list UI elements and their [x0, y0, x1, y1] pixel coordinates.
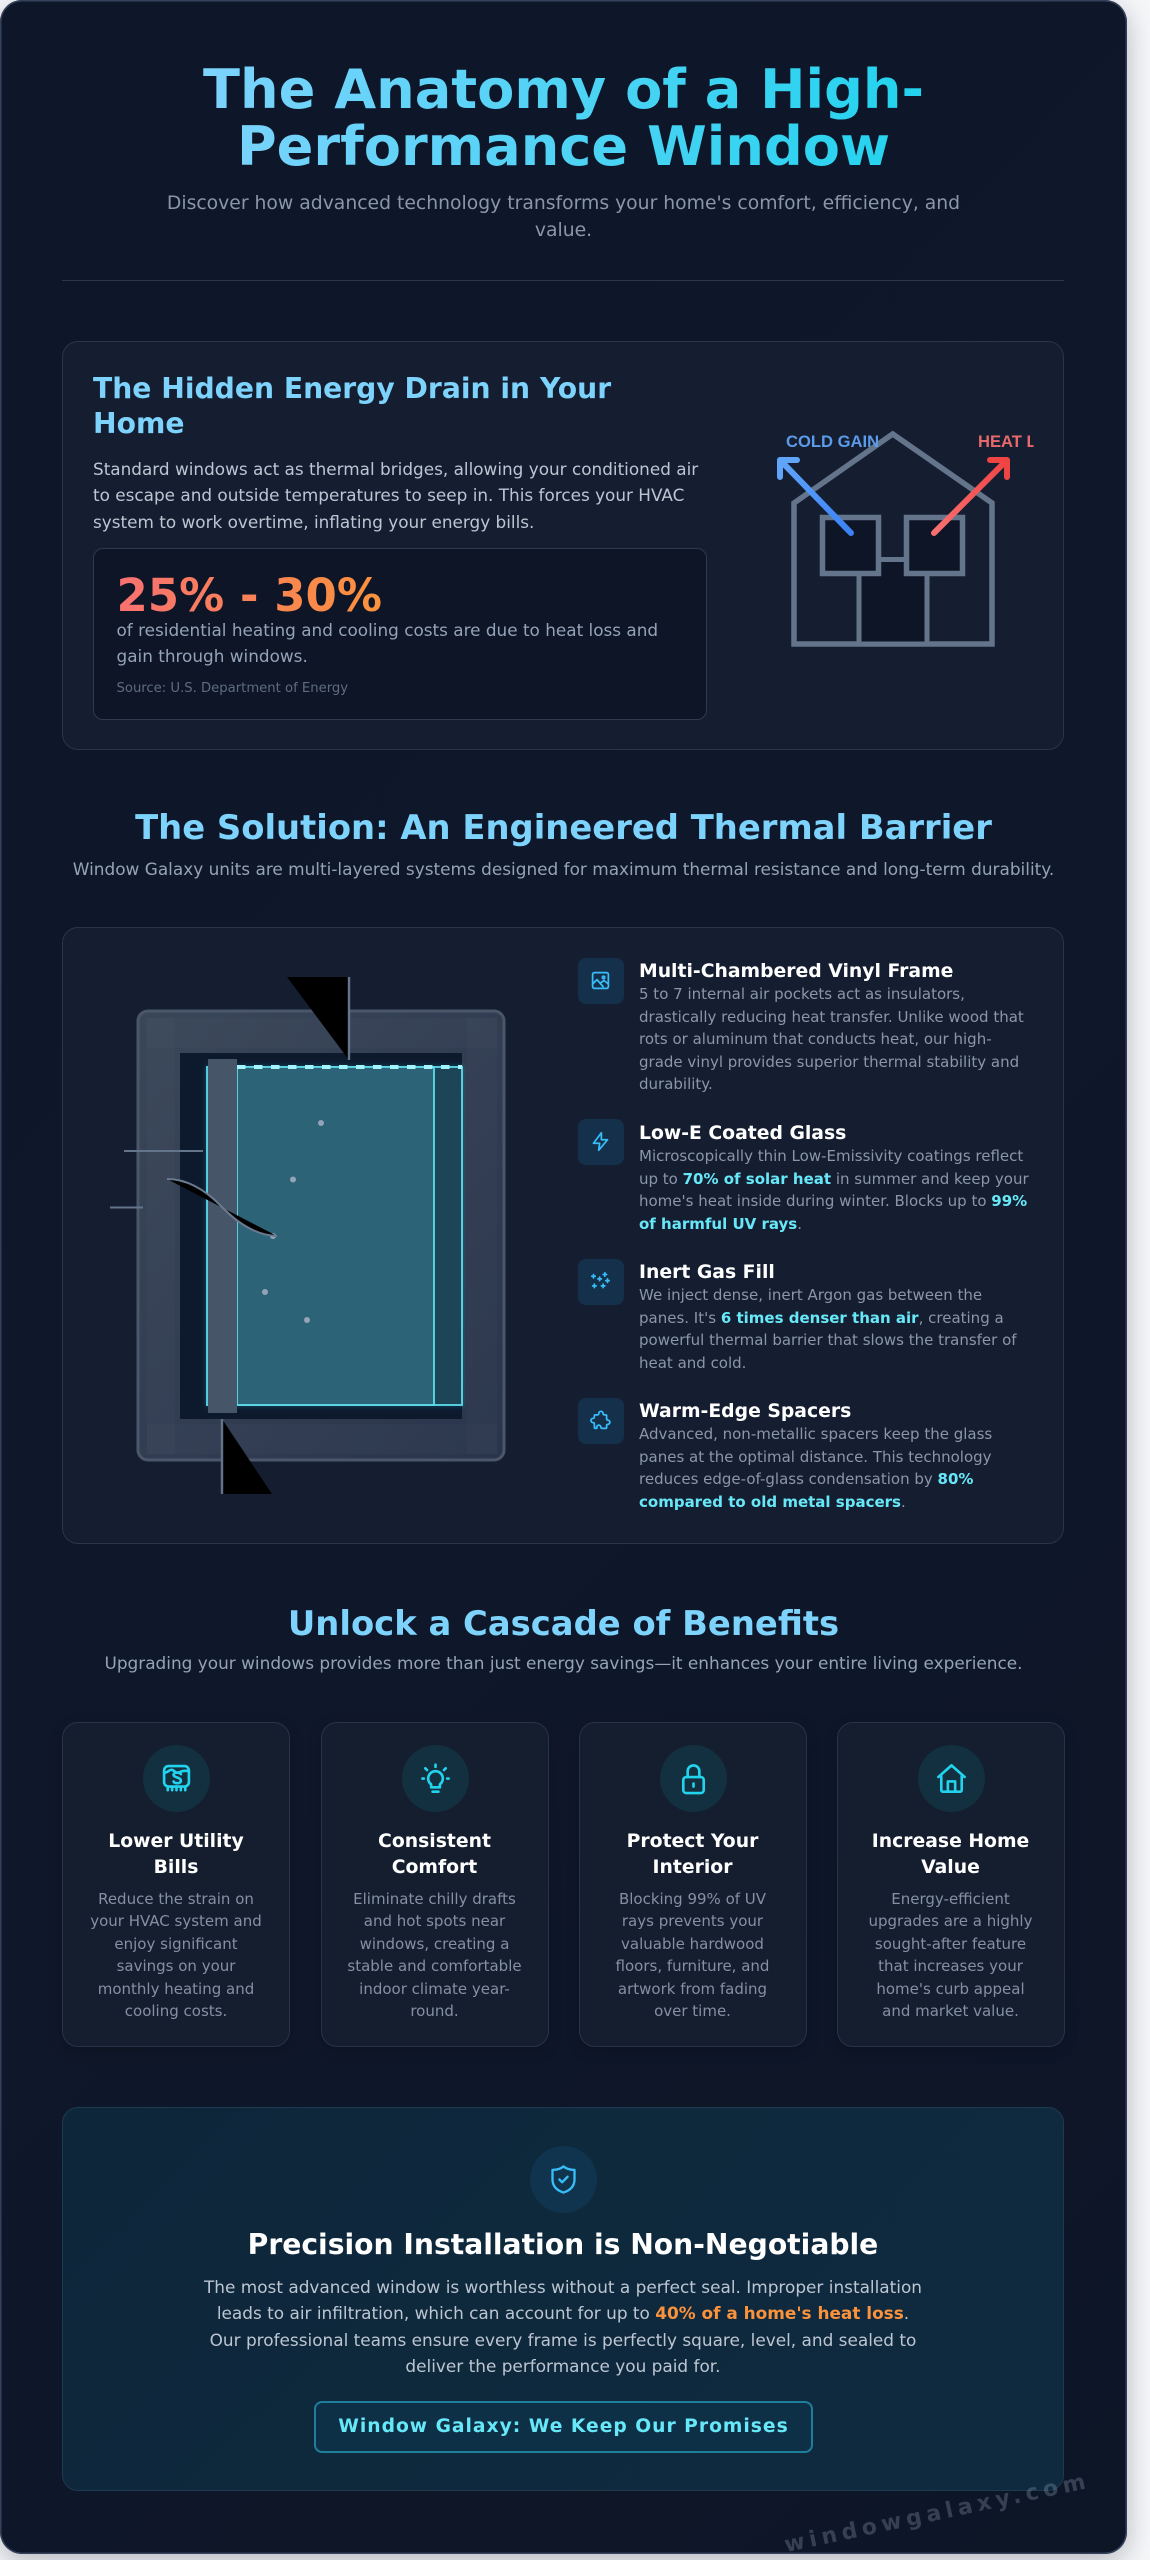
benefit card: interior [578, 1722, 806, 2047]
panel text: The most advanced window is worthless without a perfect seal. Improper installation [204, 2277, 922, 2297]
card text: floors, furniture, and [616, 1957, 769, 1975]
card title: Increase Home [872, 1830, 1029, 1852]
icon: shield check [530, 2146, 597, 2213]
card title: Bills [154, 1856, 198, 1878]
panel text [204, 2277, 922, 2376]
feature text: glass: of harmful UV rays. [639, 1214, 802, 1232]
feature text: spacers: reduces edge-of-glass condensation by 80% [639, 1470, 973, 1488]
card title: Lower Utility [108, 1830, 244, 1852]
card title: Consistent [378, 1830, 491, 1852]
feature text: spacers: Advanced, non-metallic spacers keep the glass [639, 1425, 992, 1443]
problem text [93, 459, 698, 532]
title [203, 58, 924, 178]
card text: Blocking 99% of UV [619, 1890, 766, 1908]
heat arrow [934, 460, 1007, 533]
low-e coating line [237, 1065, 462, 1069]
feature text: spacers: compared to old metal spacers. [639, 1492, 906, 1510]
header divider [62, 280, 1064, 281]
pointer: gas curve [167, 1179, 277, 1236]
icon: lock [660, 1745, 726, 1812]
left window [822, 518, 878, 574]
feature text: gas: We inject dense, inert Argon gas between the [639, 1286, 982, 1304]
panel heading: Home [93, 407, 184, 440]
panel text: leads to air infiltration, which can account for up to 40% of a home's heat loss. [217, 2303, 909, 2323]
card text [868, 1890, 1032, 2020]
card title [627, 1830, 758, 1878]
card text [616, 1890, 769, 2020]
card text: artwork from fading [618, 1980, 767, 1998]
feature icon: glass [578, 1119, 624, 1164]
feature text: gas: panes. It's 6 times denser than air, creating a [639, 1308, 1004, 1326]
card text [347, 1890, 522, 2020]
pointer: frame [124, 1150, 203, 1152]
card text: and market value. [882, 2002, 1019, 2020]
feature text: spacers: panes at the optimal distance. This technology [639, 1448, 992, 1466]
icon: light bulb [402, 1745, 468, 1812]
feature text: frame: rots or aluminum that conducts heat, our high- [639, 1030, 992, 1048]
feature icon: gas [578, 1259, 624, 1304]
section subheading: solution: Window Galaxy units are multi-layered systems designed for maximum thermal resistance and long-term durability. [73, 858, 1054, 878]
subtitle: value. [535, 220, 592, 241]
stat description: of residential heating and cooling costs are due to heat loss and [116, 620, 658, 640]
panel: precision installation [62, 2107, 1064, 2491]
spacer bar [208, 1059, 237, 1413]
card text: Eliminate chilly drafts [353, 1890, 516, 1908]
card text: over time. [654, 2002, 731, 2020]
call to action button: Window Galaxy: We Keep Our Promises [338, 2416, 789, 2437]
panel text: Our professional teams ensure every frame is perfectly square, level, and sealed to [210, 2330, 916, 2350]
window cross-section diagram [110, 977, 506, 1494]
icon: bill [143, 1745, 210, 1812]
subtitle [167, 193, 960, 241]
house outline [794, 434, 992, 644]
card text: your HVAC system and [90, 1912, 262, 1930]
card text: indoor climate year- [359, 1980, 510, 1998]
feature text: gas [639, 1286, 1017, 1372]
call to action button [314, 2401, 813, 2453]
card title [378, 1830, 491, 1878]
card text: home's curb appeal [876, 1980, 1025, 1998]
stat description [116, 620, 658, 666]
inner glass pane [237, 1067, 434, 1405]
card text: Reduce the strain on [98, 1890, 254, 1908]
title: The Anatomy of a High- [203, 58, 924, 121]
pointer: chamber [110, 1206, 143, 1208]
card text: that increases your [878, 1957, 1023, 1975]
section subheading: benefits: Upgrading your windows provides more than just energy savings—it enhances your entire living experience. [104, 1653, 1023, 1673]
cold arrow [780, 460, 851, 533]
problem text: to escape and outside temperatures to seep in. This forces your HVAC [93, 485, 684, 505]
feature title: gas: Inert Gas Fill [639, 1262, 775, 1282]
benefit card: utility bills [62, 1722, 290, 2047]
feature text: frame [639, 985, 1024, 1093]
feature title: glass: Low-E Coated Glass [639, 1122, 846, 1144]
stat number: 25% - 30% [116, 569, 382, 622]
card title [108, 1830, 244, 1878]
card text: stable and comfortable [347, 1957, 522, 1975]
card title: Interior [653, 1856, 732, 1878]
stat description: gain through windows. [116, 646, 308, 666]
card text: and hot spots near [364, 1912, 505, 1930]
card title: Value [921, 1856, 980, 1878]
subtitle: Discover how advanced technology transforms your home's comfort, efficiency, and [167, 193, 960, 214]
section heading: solution: The Solution: An Engineered Thermal Barrier [135, 808, 992, 847]
benefit card: home value [836, 1722, 1064, 2047]
card text: Energy-efficient [891, 1890, 1010, 1908]
feature title: frame: Multi-Chambered Vinyl Frame [639, 960, 953, 982]
feature text: gas: powerful thermal barrier that slows the transfer of [639, 1331, 1017, 1349]
feature text: gas: heat and cold. [639, 1354, 746, 1372]
panel heading: The Hidden Energy Drain in Your [93, 372, 611, 405]
panel text: deliver the performance you paid for. [405, 2356, 721, 2376]
card text: monthly heating and [98, 1980, 254, 1998]
outer glass pane [207, 1067, 462, 1405]
gas fill dots [262, 1120, 324, 1323]
card text: rays prevents your [622, 1912, 763, 1930]
feature text: frame: durability. [639, 1075, 713, 1093]
pointer: top stem [348, 977, 350, 1060]
panel: engineered window [62, 927, 1064, 1544]
feature text: frame: drastically reducing heat transfer. Unlike wood that [639, 1008, 1024, 1026]
panel heading [93, 372, 612, 440]
frame chambers [147, 1018, 497, 1454]
feature text: glass: Microscopically thin Low-Emissivity coatings reflect [639, 1147, 1023, 1165]
feature icon: spacers [578, 1398, 624, 1444]
stat callout [93, 548, 707, 720]
feature icon: frame [578, 958, 624, 1004]
glass glow [207, 1067, 462, 1405]
feature title: spacers: Warm-Edge Spacers [639, 1400, 851, 1422]
dark inner opening [180, 1053, 462, 1419]
card text: valuable hardwood [621, 1935, 764, 1953]
door [859, 560, 927, 644]
card text: sought-after feature [875, 1935, 1026, 1953]
feature text: glass [639, 1147, 1029, 1232]
outer vinyl frame [138, 1011, 504, 1460]
card text [90, 1890, 262, 2020]
card title [872, 1830, 1029, 1878]
feature text: spacers [639, 1425, 992, 1510]
card text: round. [410, 2002, 459, 2020]
card text: upgrades are a highly [868, 1912, 1032, 1930]
house heat loss diagram [777, 430, 1034, 647]
right window [906, 518, 962, 574]
pointer: bottom wedge [222, 1419, 272, 1494]
problem text: Standard windows act as thermal bridges, allowing your conditioned air [93, 459, 698, 479]
cold gain label: COLD GAIN [786, 432, 879, 451]
icon: house [918, 1745, 984, 1812]
problem text: system to work overtime, inflating your energy bills. [93, 512, 534, 532]
card text: windows, creating a [360, 1935, 509, 1953]
stat source: Source: U.S. Department of Energy [116, 681, 348, 696]
pointer: bottom stem [221, 1419, 223, 1494]
panel heading: Precision Installation is Non-Negotiable [248, 2228, 878, 2261]
feature text: frame: 5 to 7 internal air pockets act as insulators, [639, 985, 965, 1003]
benefit card: comfort [320, 1722, 548, 2047]
card text: enjoy significant [114, 1935, 238, 1953]
feature text: frame: grade vinyl provides superior thermal stability and [639, 1052, 1019, 1070]
card title: Protect Your [627, 1830, 758, 1852]
panel: hidden energy drain [62, 341, 1064, 750]
section heading: benefits: Unlock a Cascade of Benefits [288, 1604, 839, 1643]
feature text: glass: up to 70% of solar heat in summer and keep your [639, 1170, 1029, 1188]
card text: savings on your [117, 1957, 235, 1975]
pointer: gas curve stroke [167, 1179, 277, 1236]
card text: cooling costs. [125, 2002, 227, 2020]
card title: Comfort [392, 1856, 477, 1878]
title: Performance Window [237, 114, 890, 178]
feature text: glass: home's heat inside during winter. Blocks up to 99% [639, 1192, 1027, 1210]
pointer: low-e top [287, 977, 349, 1060]
